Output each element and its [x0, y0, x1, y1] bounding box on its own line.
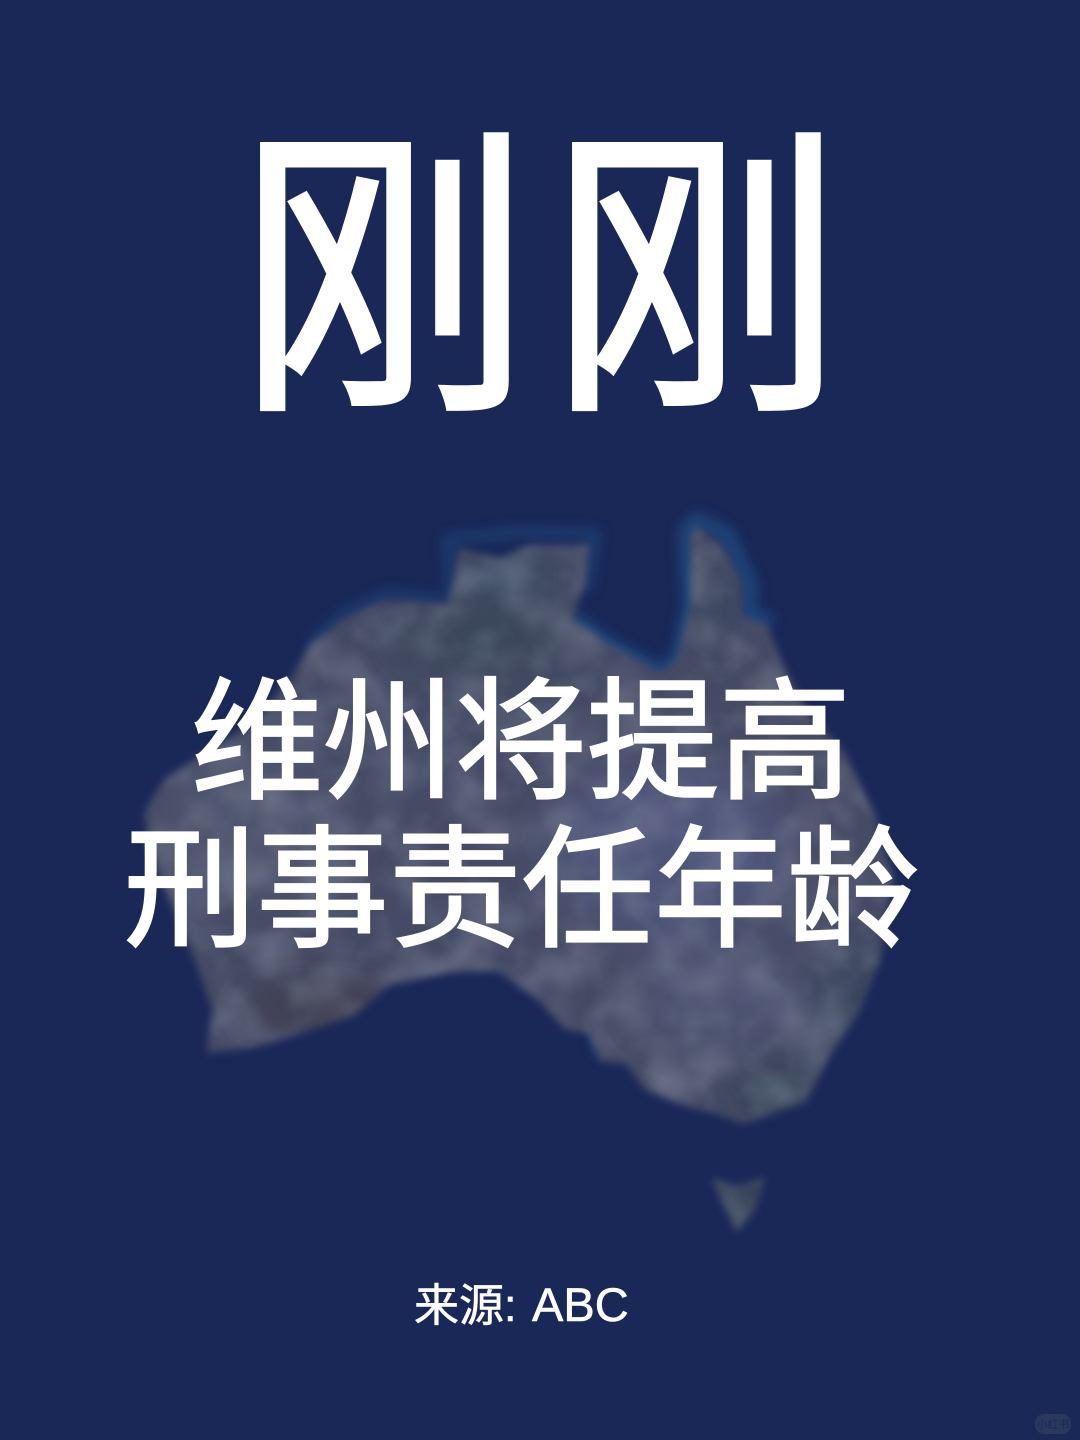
headline line 1: 维州将提高 [191, 669, 851, 816]
watermark badge: 小红书 [1036, 1418, 1070, 1431]
coastal shallows [309, 520, 772, 1055]
title: 刚刚: 刚刚 [237, 110, 861, 451]
headline line 2: 刑事责任年龄 [124, 817, 920, 964]
map: Australia satellite image [130, 510, 910, 1250]
source: 来源: ABC [414, 1278, 629, 1331]
headline [124, 669, 920, 964]
watermark badge [1035, 1414, 1071, 1434]
land colour variation [160, 546, 865, 1232]
mainland and island land surface [130, 510, 910, 1250]
